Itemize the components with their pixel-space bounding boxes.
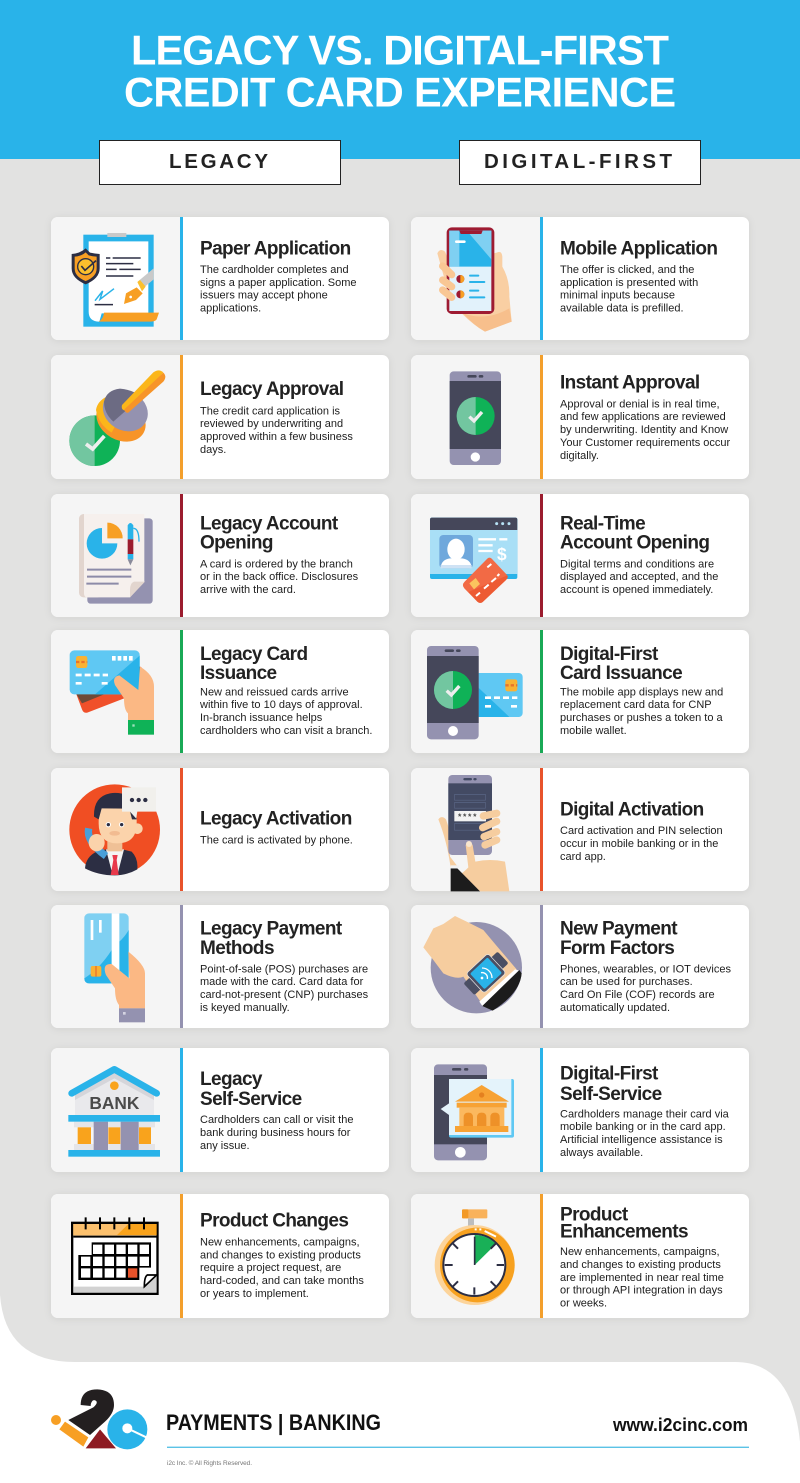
description xyxy=(200,558,359,596)
website: www.i2cinc.com xyxy=(612,1414,748,1435)
description: New enhancements, campaigns, xyxy=(200,1237,360,1249)
heading: Digital-First xyxy=(560,1063,659,1084)
icon: phone with bank bubble xyxy=(434,1064,514,1160)
description: made with the card. Card data for xyxy=(200,976,364,988)
card: Legacy Account Opening xyxy=(51,494,389,617)
icon: browser window with id and card xyxy=(430,518,517,603)
description: The mobile app displays new and xyxy=(560,686,723,698)
description: or through API integration in days xyxy=(560,1285,723,1297)
heading: Real-Time xyxy=(560,513,645,534)
description: Phones, wearables, or IOT devices xyxy=(560,963,731,975)
heading: Digital-First xyxy=(560,644,659,665)
icon: hand holding card xyxy=(84,913,145,1022)
icon: hand holding phone xyxy=(437,227,512,332)
description: hard-coded, and can take months xyxy=(200,1275,364,1287)
description: minimal inputs because xyxy=(560,290,675,302)
description: by underwriting. Identity and Know xyxy=(560,424,728,436)
icon: browser window with id and card: $ xyxy=(497,544,507,564)
description: or years to implement. xyxy=(200,1288,309,1300)
heading: Legacy xyxy=(200,1069,263,1090)
description: Artificial intelligence assistance is xyxy=(560,1134,723,1146)
card: Digital-First Self-Service xyxy=(411,1048,749,1172)
description: can be used for purchases. xyxy=(560,976,693,988)
description xyxy=(560,1246,724,1310)
description: mobile banking or in the card app. xyxy=(560,1121,726,1133)
card: Real-Time Account Opening xyxy=(411,494,749,617)
heading: Legacy Account xyxy=(200,513,339,534)
description: purchases or pushes a token to a xyxy=(560,712,724,724)
description: automatically updated. xyxy=(560,1002,670,1014)
tagline: PAYMENTS | BANKING xyxy=(166,1410,381,1435)
heading: Mobile Application xyxy=(560,238,717,259)
heading: New Payment xyxy=(560,919,678,940)
description: Approval or denial is in real time, xyxy=(560,398,720,410)
column header: digital-first xyxy=(460,140,700,184)
description: Your Customer requirements occur xyxy=(560,437,731,449)
heading: Enhancements xyxy=(560,1222,688,1243)
icon: phone with check mark xyxy=(450,371,501,465)
description: The card is activated by phone. xyxy=(200,834,353,846)
heading: Product xyxy=(560,1204,629,1225)
header: title band xyxy=(0,0,800,159)
title: LEGACY VS. DIGITAL-FIRST xyxy=(131,26,669,74)
icon: hands entering PIN on a phone xyxy=(438,775,509,891)
icon: bank building xyxy=(68,1069,160,1157)
description: signs a paper application. Some xyxy=(200,277,357,289)
description: and changes to existing products xyxy=(200,1250,361,1262)
icon: calendar xyxy=(72,1217,157,1294)
heading: Account Opening xyxy=(560,533,709,554)
description: A card is ordered by the branch xyxy=(200,558,353,570)
description: or in the back office. Disclosures xyxy=(200,571,359,583)
description: reviewed by underwriting and xyxy=(200,418,343,430)
icon: man on the phone with speech bubble xyxy=(69,784,160,875)
logo: i2c xyxy=(51,1389,148,1449)
icon: hand holding credit cards xyxy=(70,650,154,735)
description xyxy=(200,1114,353,1152)
description: any issue. xyxy=(200,1140,250,1152)
description: issuers may accept phone xyxy=(200,290,328,302)
description: require a project request, are xyxy=(200,1262,341,1274)
column header: legacy: LEGACY xyxy=(169,150,268,173)
description: The cardholder completes and xyxy=(200,264,349,276)
description xyxy=(560,398,731,462)
description: Point-of-sale (POS) purchases are xyxy=(200,963,368,975)
description: The credit card application is xyxy=(200,405,341,417)
description: In-branch issuance helps xyxy=(200,712,323,724)
description xyxy=(199,686,372,737)
description: and few applications are reviewed xyxy=(560,411,726,423)
card: Legacy Self-Service xyxy=(51,1048,389,1172)
column header: digital-first: DIGITAL-FIRST xyxy=(484,150,672,173)
heading: Product Changes xyxy=(200,1211,348,1232)
icon: wrist with smartwatch xyxy=(423,916,522,1013)
description: or weeks. xyxy=(560,1298,607,1310)
description: displayed and accepted, and the xyxy=(560,571,718,583)
description: Digital terms and conditions are xyxy=(560,558,714,570)
card: Legacy Activation xyxy=(51,768,389,891)
heading: Methods xyxy=(200,938,274,959)
description xyxy=(560,963,731,1014)
heading: Legacy Payment xyxy=(200,919,343,940)
heading: Card Issuance xyxy=(560,663,682,684)
description: account is opened immediately. xyxy=(560,584,713,596)
description: The offer is clicked, and the xyxy=(560,264,694,276)
description xyxy=(560,686,724,737)
description: arrive with the card. xyxy=(200,584,296,596)
card: Legacy Approval xyxy=(51,355,389,479)
card: Legacy Card Issuance xyxy=(51,630,389,753)
description xyxy=(200,963,369,1014)
icon: bank building: BANK xyxy=(89,1093,139,1113)
description: mobile wallet. xyxy=(560,725,627,737)
icon: document with pie chart and pen xyxy=(79,514,153,604)
icon: hands entering PIN on a phone: **** xyxy=(458,812,478,822)
column header: legacy xyxy=(100,140,340,184)
description: digitally. xyxy=(560,450,599,462)
description: card app. xyxy=(560,851,606,863)
card: Mobile Application xyxy=(411,217,749,340)
heading: Paper Application xyxy=(200,238,351,259)
heading: Legacy Activation xyxy=(200,808,352,829)
icon: phone with credit card xyxy=(427,646,523,739)
description: New enhancements, campaigns, xyxy=(560,1246,720,1258)
description: applications. xyxy=(200,302,261,314)
description: Cardholders can call or visit the xyxy=(200,1114,353,1126)
description xyxy=(560,264,698,314)
heading: Legacy Approval xyxy=(200,379,343,400)
description: replacement card data for CNP xyxy=(560,699,712,711)
footer xyxy=(51,1389,749,1467)
title: CREDIT CARD EXPERIENCE xyxy=(124,68,676,116)
description: occur in mobile banking or in the xyxy=(560,838,718,850)
description xyxy=(200,1237,364,1300)
description: Card On File (COF) records are xyxy=(560,989,715,1001)
card: New Payment Form Factors xyxy=(411,905,749,1028)
card: Digital-First Card Issuance xyxy=(411,630,749,753)
card: Instant Approval xyxy=(411,355,749,479)
card: Product Enhancements xyxy=(411,1194,749,1318)
icon: stopwatch xyxy=(435,1209,515,1305)
heading: Issuance xyxy=(200,663,277,684)
description: Card activation and PIN selection xyxy=(560,825,723,837)
heading: Instant Approval xyxy=(560,372,700,393)
heading: Digital Activation xyxy=(560,799,704,820)
heading: Opening xyxy=(200,533,273,554)
description: bank during business hours for xyxy=(200,1127,351,1139)
description: within five to 10 days of approval. xyxy=(199,699,363,711)
description: days. xyxy=(200,444,226,456)
heading: Form Factors xyxy=(560,938,674,959)
card: Legacy Payment Methods xyxy=(51,905,389,1028)
description: card-not-present (CNP) purchases xyxy=(200,989,369,1001)
description: application is presented with xyxy=(560,277,698,289)
heading: Self-Service xyxy=(200,1089,302,1110)
description xyxy=(560,558,718,596)
description xyxy=(560,825,723,863)
description xyxy=(200,264,357,314)
description: always available. xyxy=(560,1147,643,1159)
description: approved within a few business xyxy=(200,431,353,443)
description: cardholders who can visit a branch. xyxy=(200,725,372,737)
copyright: i2c Inc. © All Rights Reserved. xyxy=(167,1459,252,1467)
card: Digital Activation xyxy=(411,768,749,891)
description: available data is prefilled. xyxy=(560,302,684,314)
description: is keyed manually. xyxy=(200,1002,290,1014)
description xyxy=(200,405,353,456)
icon: approval stamp xyxy=(69,370,165,466)
description: and changes to existing products xyxy=(560,1259,721,1271)
description: New and reissued cards arrive xyxy=(200,686,349,698)
description: are implemented in near real time xyxy=(560,1272,724,1284)
card: Product Changes xyxy=(51,1194,389,1318)
description xyxy=(560,1108,730,1159)
description: Cardholders manage their card via xyxy=(560,1108,730,1120)
heading: Legacy Card xyxy=(200,644,307,665)
card: Paper Application xyxy=(51,217,389,340)
heading: Self-Service xyxy=(560,1084,662,1105)
icon: clipboard with shield and pen xyxy=(72,233,159,327)
